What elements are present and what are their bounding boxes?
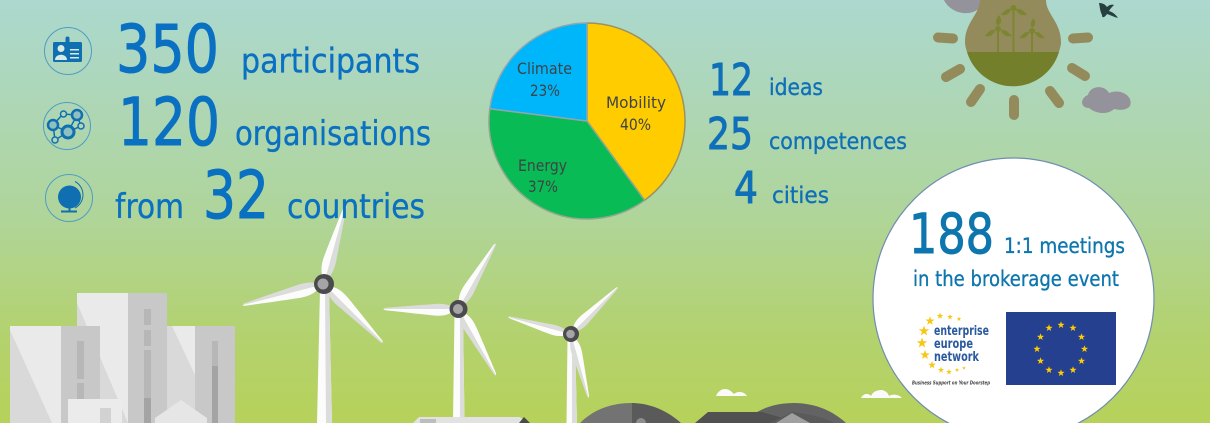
stat: 350 participants <box>116 11 420 88</box>
illustration: small white clouds <box>716 389 902 398</box>
callout: brokerage event circle <box>873 158 1154 423</box>
stat: 4 cities: 4 <box>734 163 758 214</box>
logo: enterprise europe network: enterprise <box>934 324 989 339</box>
stat: 350 participants: participants <box>241 42 420 82</box>
pie label: mobility: 40% <box>620 115 651 134</box>
stat: 120 organisations: 120 <box>118 84 220 161</box>
stat: 12 ideas: ideas <box>769 75 823 101</box>
stat: 12 ideas: 12 <box>709 55 753 106</box>
pie slice: climate <box>490 23 587 121</box>
cloud behind bulb <box>943 0 986 13</box>
pie slice: energy <box>489 109 645 219</box>
pie slice: mobility <box>587 23 685 200</box>
stat: from 32 countries: from <box>115 187 184 227</box>
bulb seedlings <box>985 6 1045 52</box>
bulb rays <box>938 38 1088 115</box>
stat: 120 organisations <box>118 84 431 161</box>
stat: 188 meetings: 188 <box>909 202 994 266</box>
pie label: climate: Climate <box>517 59 572 78</box>
stat: 25 competences: 25 <box>707 109 753 160</box>
pie label: energy: 37% <box>528 177 558 196</box>
illustration: wind turbine 3 <box>507 283 621 423</box>
illustration: wind turbine 1 <box>241 202 388 423</box>
bulb body <box>965 0 1061 52</box>
stat: from 32 countries <box>115 157 425 234</box>
illustration: city buildings <box>10 293 235 423</box>
bulb ground <box>967 52 1059 86</box>
stat: 4 cities <box>734 163 829 214</box>
illustration: light bulb sun with rays <box>938 0 1088 115</box>
illustration: grey cloud <box>1082 87 1131 113</box>
pie label: mobility <box>606 93 666 134</box>
stat: 188 meetings <box>909 202 1125 266</box>
stat: 12 ideas <box>709 55 823 106</box>
icon: people network <box>44 102 90 150</box>
pie label: energy: Energy <box>518 156 567 175</box>
pie label: energy <box>518 156 567 196</box>
logo: enterprise europe network: europe <box>934 337 973 352</box>
stat: 188 meetings: 1:1 meetings <box>1004 234 1125 258</box>
pie chart: topic shares <box>489 23 685 219</box>
pie label: climate: 23% <box>530 81 560 100</box>
icon: globe <box>46 174 92 222</box>
pie label: mobility: Mobility <box>606 93 666 112</box>
stat: 350 participants: 350 <box>116 11 219 88</box>
logo: EU flag <box>1006 312 1116 385</box>
logo: enterprise europe network <box>912 312 990 386</box>
stat: 25 competences: competences <box>769 129 907 155</box>
pie label: climate <box>517 59 572 100</box>
illustration: village houses <box>413 403 846 423</box>
stat: from 32 countries: countries <box>287 187 425 227</box>
icon: swallow <box>1099 3 1118 18</box>
stat: 120 organisations: organisations <box>235 114 431 154</box>
illustration: wind turbine 2 <box>383 240 502 420</box>
logo: enterprise europe network: network <box>934 350 979 365</box>
stat: 4 cities: cities <box>772 183 829 209</box>
icon: id badge <box>44 28 92 74</box>
stat: 25 competences <box>707 109 907 160</box>
text: in the brokerage event: in the brokerage event <box>913 267 1119 291</box>
logo: enterprise europe network: Business Support on Your Doorstep <box>912 380 990 386</box>
stat: from 32 countries: 32 <box>203 157 269 234</box>
